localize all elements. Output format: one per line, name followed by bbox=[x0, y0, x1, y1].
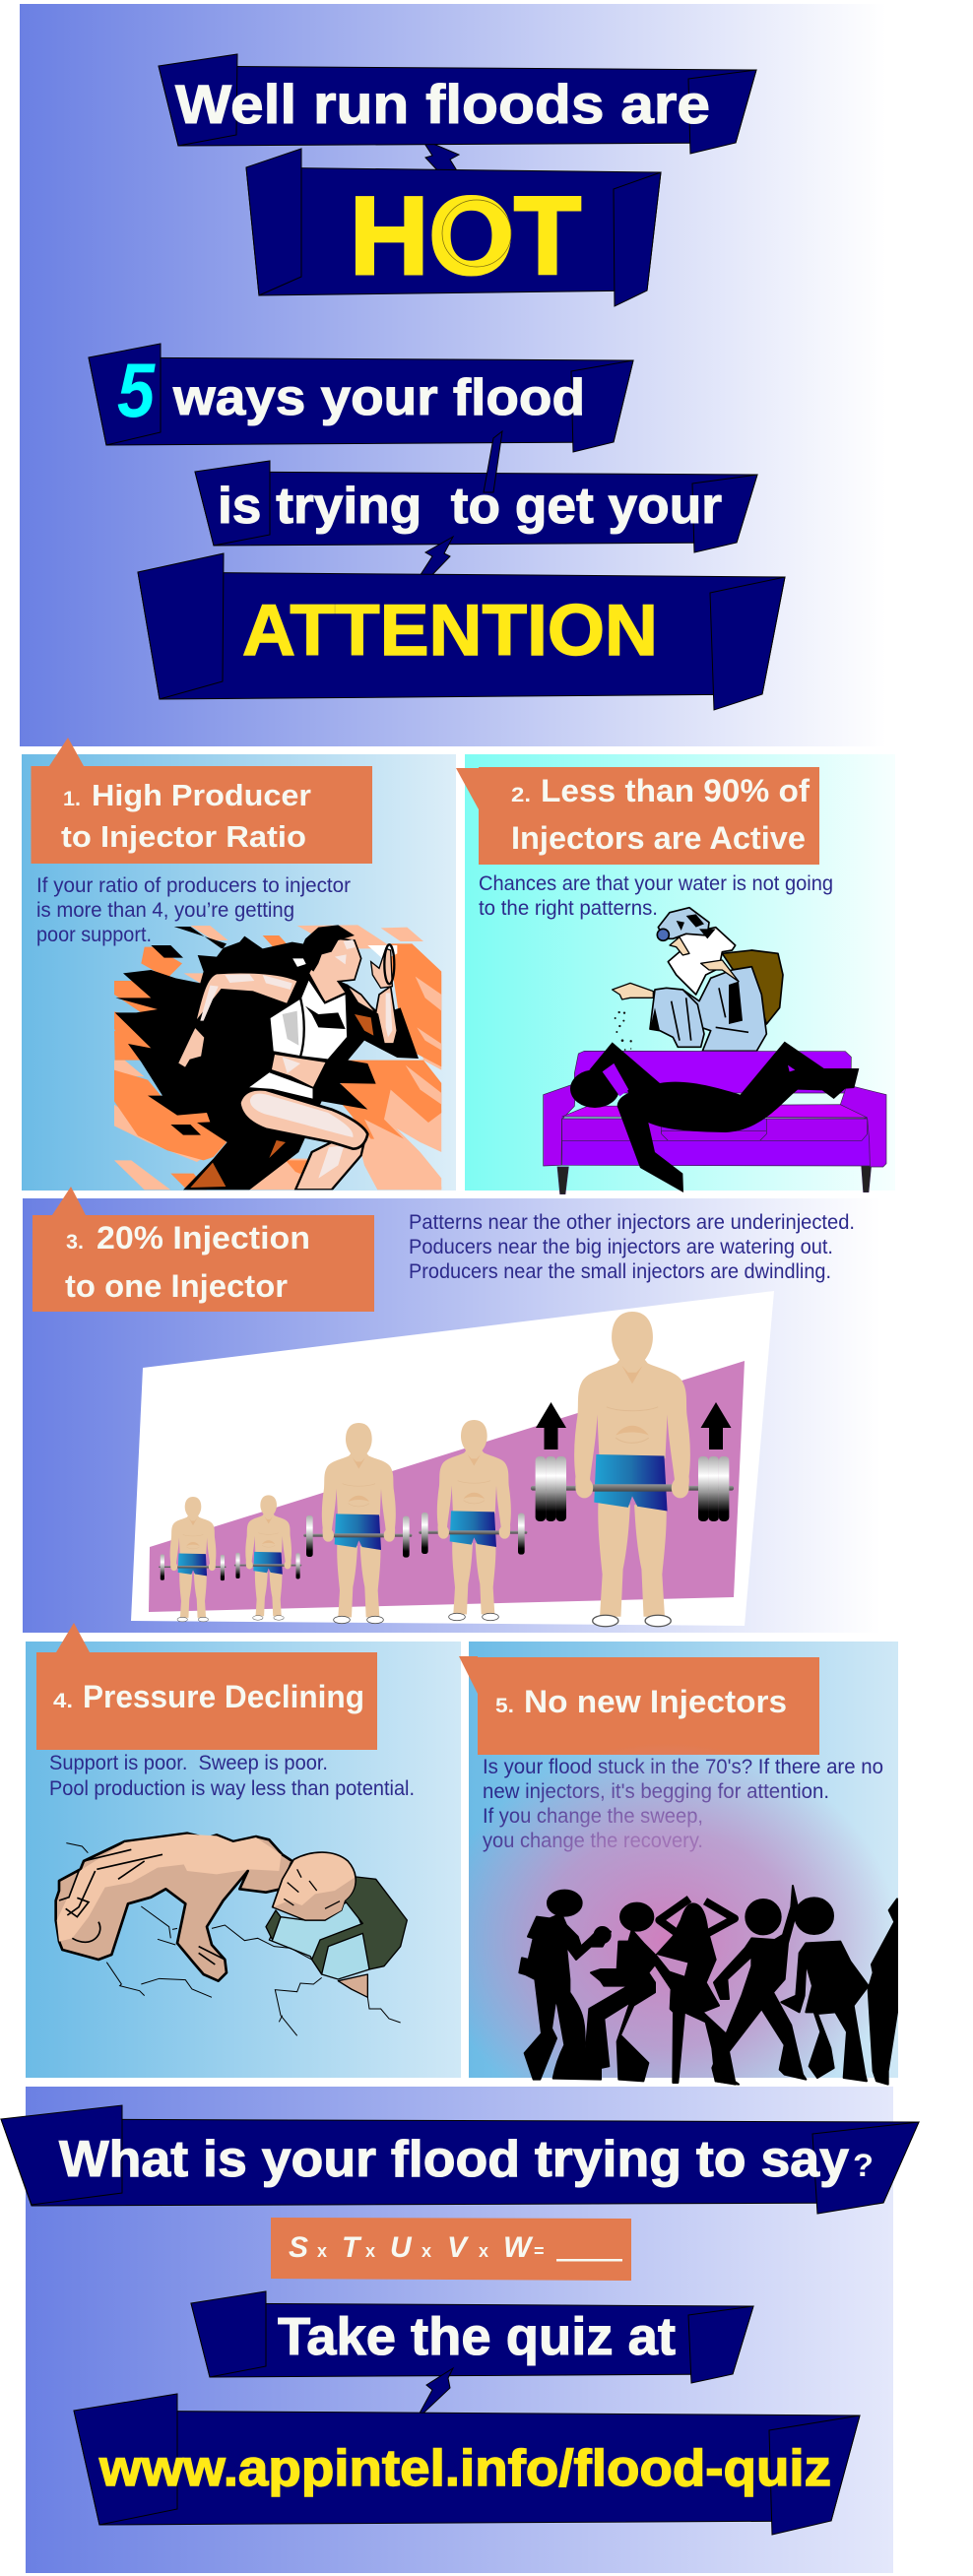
heading callout 2 bbox=[456, 767, 819, 865]
chart: rising white card with purple wedge bbox=[131, 1291, 774, 1626]
text block 4 bbox=[49, 1752, 415, 1800]
banner: 5 ways your flood: ways your flood bbox=[172, 369, 585, 426]
callout: quiz formula: x bbox=[422, 2241, 431, 2261]
jacket and shirt bbox=[266, 1877, 407, 1997]
lifter 1 small bbox=[159, 1497, 227, 1622]
text block 1 bbox=[36, 874, 351, 946]
heading callout 1: 1. bbox=[63, 788, 81, 810]
pink spotlight glow bbox=[469, 1752, 884, 2078]
cracks bbox=[66, 1843, 401, 2035]
heading callout 1: to Injector Ratio bbox=[61, 819, 306, 854]
illustration: wizard above sleeper on purple sofa bbox=[544, 908, 886, 1194]
banner: 5 ways your flood: 5 bbox=[117, 347, 156, 433]
panel 2: less than 90% of injectors active bbox=[456, 754, 895, 1194]
dancer 6 bbox=[869, 1899, 897, 2085]
panel 3: 20% injection to one injector bbox=[23, 1187, 881, 1633]
banner: website address: www.appintel.info/flood-quiz bbox=[98, 2440, 831, 2497]
arrow: up left of large lifter bbox=[536, 1402, 566, 1449]
heading callout 5: No new Injectors bbox=[524, 1684, 787, 1719]
panel 5: no new injectors bbox=[459, 1642, 898, 2085]
text block 4: Support is poor. Sweep is poor. bbox=[49, 1752, 328, 1774]
text block 3 bbox=[409, 1211, 855, 1283]
banner: What is your flood trying to say? bbox=[1, 2105, 919, 2214]
banner: Take the quiz at bbox=[191, 2291, 753, 2383]
text block 5 bbox=[483, 1756, 883, 1852]
heading callout 4 bbox=[36, 1623, 377, 1750]
text block 1: If your ratio of producers to injector bbox=[36, 874, 351, 897]
text block 3: Poducers near the big injectors are watering out. bbox=[409, 1236, 833, 1258]
dancer 3 bbox=[657, 1899, 739, 2085]
lifter 4 medium bbox=[419, 1420, 527, 1621]
heading callout 4: Pressure Declining bbox=[83, 1679, 364, 1714]
text block 1: poor support. bbox=[36, 924, 152, 946]
head bbox=[273, 1852, 356, 1920]
banner: HOT bbox=[246, 149, 661, 306]
text block 3: Patterns near the other injectors are underinjected. bbox=[409, 1211, 855, 1234]
icon: sleeping black figure bbox=[570, 1042, 859, 1192]
illustration: disco dancers silhouettes bbox=[519, 1886, 897, 2085]
panel 1: high producer to injector ratio bbox=[22, 738, 456, 1191]
illustration: sprinting woman bbox=[114, 925, 441, 1190]
banner: HOT: HOT bbox=[350, 174, 581, 297]
banner: Take the quiz at: Take the quiz at bbox=[278, 2307, 676, 2366]
heading callout 3: 3. bbox=[66, 1231, 84, 1254]
heading callout 2: 2. bbox=[511, 784, 531, 806]
hand bbox=[56, 1834, 292, 1981]
lifter 2 small bbox=[234, 1495, 301, 1620]
banner: Well run floods are: Well run floods are bbox=[175, 73, 710, 135]
callout: quiz formula: x bbox=[479, 2241, 488, 2261]
heading callout 3 bbox=[32, 1187, 374, 1312]
callout: quiz formula: W bbox=[503, 2231, 534, 2264]
callout: quiz formula: U bbox=[390, 2231, 413, 2264]
banner: What is your flood trying to say?: What is your flood trying to say bbox=[59, 2131, 849, 2188]
text block 5: you change the recovery. bbox=[483, 1830, 703, 1852]
callout: quiz formula bbox=[271, 2218, 631, 2281]
dancer 2 bbox=[584, 1903, 673, 2081]
icon: purple sofa bbox=[544, 1051, 886, 1194]
text block 2: Chances are that your water is not going bbox=[479, 872, 833, 895]
banner: is trying to get your: is trying to get your bbox=[218, 478, 722, 535]
dancer 1 bbox=[519, 1891, 611, 2080]
lifter 5 large bbox=[531, 1312, 734, 1627]
heading callout 2: Less than 90% of bbox=[541, 773, 810, 808]
callout: quiz formula: S bbox=[289, 2231, 308, 2264]
panel: call to action footer bbox=[1, 2087, 919, 2573]
icon: wizard bbox=[613, 908, 783, 1051]
banner: 5 ways your flood bbox=[89, 344, 633, 452]
text block 3: Producers near the small injectors are dwindling. bbox=[409, 1260, 831, 1283]
callout: quiz formula: T bbox=[342, 2231, 362, 2264]
banner: Well run floods are bbox=[159, 54, 756, 172]
heading callout 2: Injectors are Active bbox=[511, 820, 806, 856]
banner: is trying to get your bbox=[195, 431, 757, 552]
callout: quiz formula: x bbox=[317, 2241, 327, 2261]
text block 4: Pool production is way less than potential. bbox=[49, 1777, 415, 1800]
banner: ATTENTION bbox=[138, 537, 785, 710]
text block 5: If you change the sweep, bbox=[483, 1805, 703, 1828]
panel 4: pressure declining bbox=[26, 1623, 461, 2078]
illustration: giant hand pressing man bbox=[56, 1834, 407, 2035]
banner: ATTENTION: ATTENTION bbox=[242, 591, 658, 671]
text block 2 bbox=[479, 872, 833, 920]
heading callout 4: 4. bbox=[53, 1690, 73, 1712]
heading callout 5: 5. bbox=[495, 1695, 514, 1717]
heading callout 3: 20% Injection bbox=[97, 1220, 310, 1256]
dancer 5 bbox=[781, 1898, 869, 2081]
callout: quiz formula: x bbox=[365, 2241, 375, 2261]
callout: quiz formula: = bbox=[534, 2241, 545, 2261]
heading callout 3: to one Injector bbox=[65, 1268, 288, 1304]
text block 1: is more than 4, you’re getting bbox=[36, 899, 294, 922]
text block 2: to the right patterns. bbox=[479, 897, 658, 920]
banner: website address bbox=[74, 2368, 860, 2535]
dancer 4 bbox=[712, 1886, 806, 2085]
icon: falling sand dots bbox=[615, 1011, 632, 1051]
banner: What is your flood trying to say?: ? bbox=[853, 2148, 874, 2183]
panel: title header bbox=[20, 4, 886, 746]
heading callout 5 bbox=[459, 1656, 819, 1755]
text block 5: Is your flood stuck in the 70's? If there are no bbox=[483, 1756, 883, 1778]
heading callout 1 bbox=[32, 738, 372, 864]
lifter 3 medium bbox=[303, 1423, 412, 1624]
callout: quiz formula: V bbox=[447, 2231, 470, 2264]
heading callout 1: High Producer bbox=[92, 778, 311, 812]
arrow: up right of large lifter bbox=[701, 1402, 731, 1449]
text block 5: new injectors, it's begging for attention. bbox=[483, 1780, 829, 1803]
